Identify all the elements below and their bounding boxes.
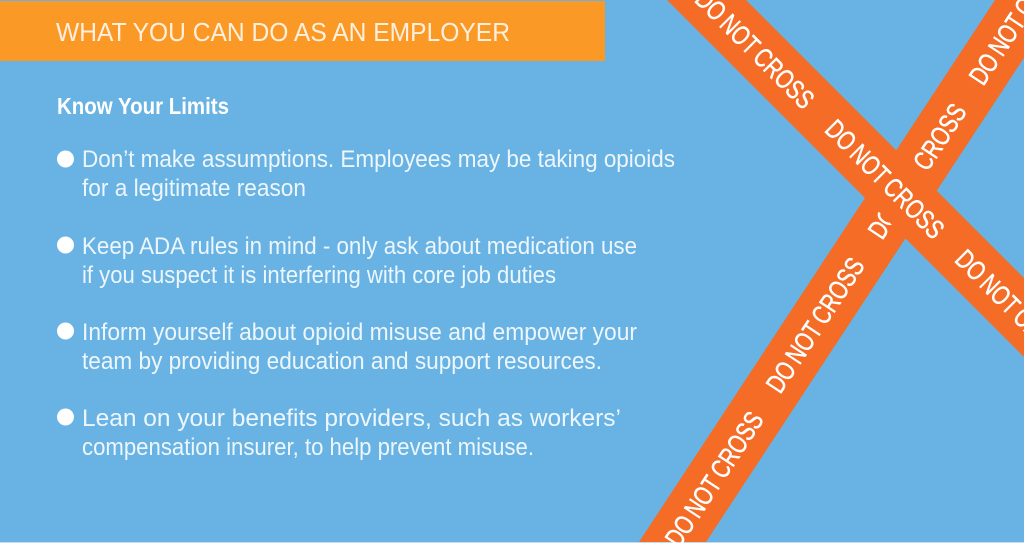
tape: rising diagonal: DO NOT CROSS bbox=[863, 99, 973, 245]
bullet 1: for a legitimate reason bbox=[82, 175, 306, 202]
bullet 4: compensation insurer, to help prevent misuse. bbox=[82, 434, 534, 461]
tape: rising diagonal bbox=[639, 0, 1024, 543]
bullet 2 bbox=[57, 233, 637, 289]
bullet 4 bbox=[57, 405, 621, 461]
bullet 3: team by providing education and support resources. bbox=[82, 348, 602, 375]
bullet 1 bbox=[57, 146, 675, 202]
tape: rising diagonal: DO NOT CROSS bbox=[761, 253, 871, 399]
bullet 3 bbox=[57, 319, 637, 375]
tape: falling diagonal bbox=[667, 0, 1024, 375]
bullet 1: Don’t make assumptions. Employees may be taking opioids bbox=[82, 146, 675, 173]
bullet 3: Inform yourself about opioid misuse and empower your bbox=[82, 319, 637, 346]
bullet 2: if you suspect it is interfering with core job duties bbox=[82, 262, 556, 289]
bullet 2: Keep ADA rules in mind - only ask about medication use bbox=[82, 233, 637, 260]
title banner: WHAT YOU CAN DO AS AN EMPLOYER bbox=[56, 17, 510, 47]
heading: know your limits: Know Your Limits bbox=[57, 93, 229, 119]
tape: falling diagonal: DO NOT CROSS bbox=[819, 114, 950, 245]
bullet 4: Lean on your benefits providers, such as workers’ bbox=[82, 405, 621, 432]
title banner bbox=[0, 1, 605, 61]
